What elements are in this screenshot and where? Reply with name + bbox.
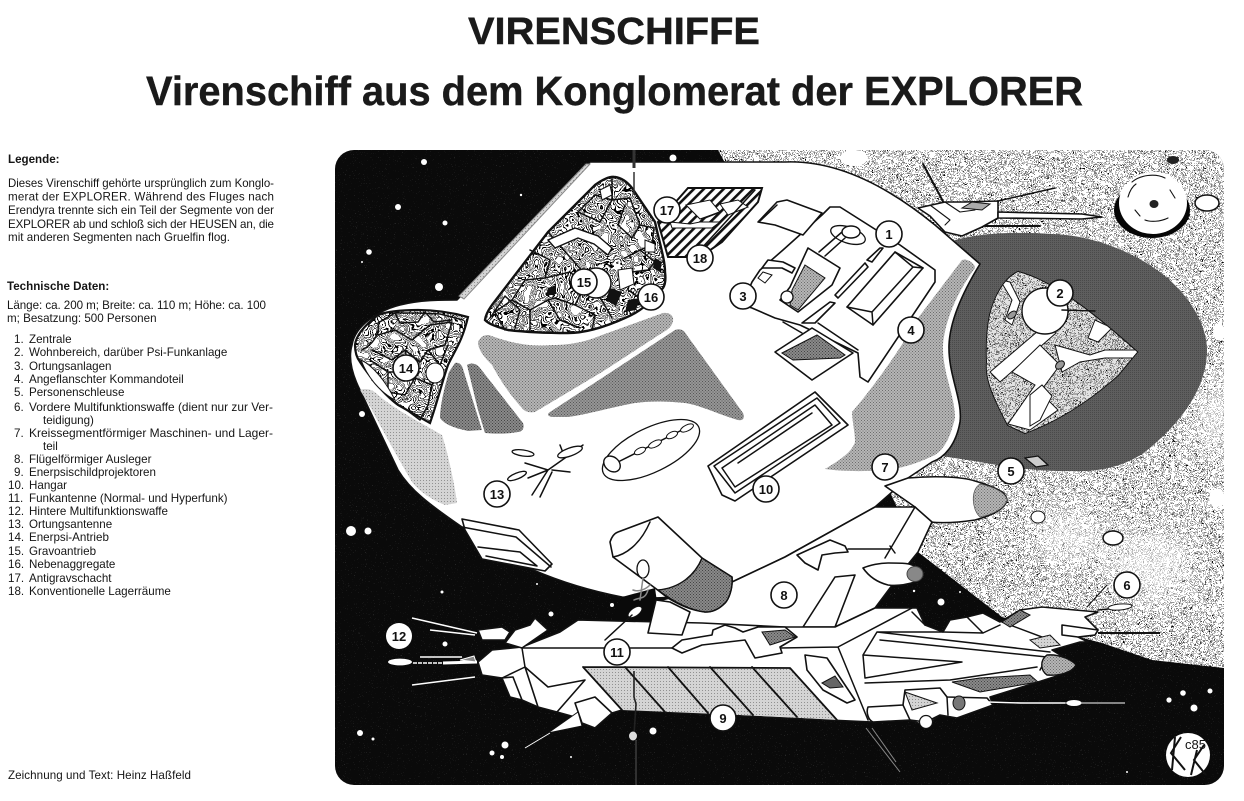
callout 4: 4 [907, 323, 915, 338]
callout 9: 9 [719, 711, 727, 726]
technical data text block [7, 280, 266, 325]
asteroid rocks [840, 150, 1225, 545]
hull edge strip [459, 164, 590, 299]
numbered parts list: 7. [14, 427, 24, 440]
space background [335, 150, 1224, 785]
numbered parts list: Enerpsischildprojektoren [29, 466, 156, 479]
title: VIRENSCHIFFE [468, 11, 760, 53]
wing lobe [885, 477, 1007, 523]
numbered parts list: teidigung) [43, 414, 94, 427]
credit line: Zeichnung und Text: Heinz Haßfeld [8, 769, 191, 782]
forward multifunction weapon 6 [1002, 585, 1160, 648]
main hull [351, 162, 980, 598]
numbered parts list: 15. [8, 545, 24, 558]
callout 11: 11 [610, 645, 624, 660]
callout 8 [771, 582, 797, 608]
numbered parts list: Wohnbereich, darüber Psi-Funkanlage [29, 346, 227, 359]
lower ship body [478, 607, 1098, 728]
callout 18: 18 [693, 251, 707, 266]
wing pylon 8 [663, 506, 933, 626]
callout 2 [1047, 280, 1073, 306]
callout 15: 15 [577, 275, 591, 290]
numbered parts list: Hangar [29, 479, 67, 492]
numbered parts list: Hintere Multifunktionswaffe [29, 505, 168, 518]
callout 10: 10 [759, 482, 773, 497]
numbered parts list: Enerpsi-Antrieb [29, 531, 109, 544]
callout 3: 3 [739, 289, 747, 304]
callout 14 [393, 355, 419, 381]
callout 13 [484, 481, 510, 507]
segment 7: dark ring disc [935, 233, 1207, 471]
rear multifunction weapon 12 [388, 618, 612, 748]
numbered parts list: Funkantenne (Normal- und Hyperfunk) [29, 492, 228, 505]
upper needle weapon [918, 164, 1102, 236]
callout 9 [710, 705, 736, 731]
fold marks [629, 150, 900, 785]
technical data text block: Technische Daten: [7, 280, 109, 293]
numbered parts list: 16. [8, 558, 24, 571]
callout 1 [876, 221, 902, 247]
asteroid surface [700, 150, 1233, 675]
numbered parts list: Flügelförmiger Ausleger [29, 453, 152, 466]
numbered parts list: Vordere Multifunktionswaffe (dient nur zur Ver- [29, 401, 273, 414]
legend text block: EXPLORER ab und schloß sich der HEUSEN an, die [8, 218, 274, 231]
signature monogram: c85 [1185, 737, 1206, 752]
legend text block: merat der EXPLORER. Während des Fluges nach [8, 190, 274, 204]
technical data text block: Länge: ca. 200 m; Breite: ca. 110 m; Höhe: ca. 100 [7, 299, 266, 312]
callout 7: 7 [881, 460, 889, 475]
numbered parts list: Angeflanschter Kommandoteil [29, 373, 184, 386]
radio antenna 11 [605, 560, 650, 640]
stripe panel 9 [583, 667, 837, 720]
numbered parts list: 13. [8, 518, 24, 531]
section 14: enerpsi drive [350, 305, 470, 425]
callout 3 [730, 283, 756, 309]
legend text block: Erendyra trennte sich ein Teil der Segmente von der [8, 204, 274, 217]
callout 10 [753, 476, 779, 502]
callout 11 [604, 639, 630, 665]
numbered parts list: Zentrale [29, 333, 72, 346]
legend text block: Legende: [8, 153, 60, 166]
crater [1114, 172, 1190, 238]
numbered parts list: 2. [14, 346, 24, 359]
numbered parts list: 1. [14, 333, 24, 346]
callout 6: 6 [1123, 578, 1131, 593]
numbered parts list [8, 333, 273, 598]
legend text block: Dieses Virenschiff gehörte ursprünglich zum Konglo- [8, 177, 274, 190]
callout 8: 8 [780, 588, 788, 603]
callout 13: 13 [490, 487, 504, 502]
callout 15 [571, 269, 597, 295]
center ellipse antenna [602, 418, 700, 482]
section 15-16: grav drive and auxiliary units [480, 172, 670, 337]
numbered parts list: Gravoantrieb [29, 545, 96, 558]
technical data text block: m; Besatzung: 500 Personen [7, 312, 157, 325]
section 2: living quarters [985, 270, 1140, 435]
callout 18 [687, 245, 713, 271]
callout 12 [386, 623, 412, 649]
numbered parts list: 9. [14, 466, 24, 479]
callout 2: 2 [1056, 286, 1064, 301]
callout 12: 12 [392, 629, 406, 644]
callout 16: 16 [644, 290, 658, 305]
numbered parts list: Kreissegmentförmiger Maschinen- und Lager- [29, 427, 273, 440]
illustration panel [335, 150, 1233, 785]
numbered parts list: Nebenaggregate [29, 558, 115, 571]
numbered parts list: 14. [8, 531, 24, 544]
numbered parts list: Ortungsantenne [29, 518, 112, 531]
small airlock [1025, 456, 1048, 467]
callout 4 [898, 317, 924, 343]
stars [346, 154, 1212, 773]
numbered parts list: 11. [8, 492, 23, 505]
lower hull hatch [462, 519, 552, 571]
numbered parts list: 18. [8, 585, 24, 598]
legend text block: mit anderen Segmenten nach Gruelfin flog. [8, 231, 230, 244]
numbered parts list: 8. [14, 453, 24, 466]
callout 17: 17 [660, 203, 674, 218]
callout 5: 5 [1007, 464, 1015, 479]
numbered parts list: Antigravschacht [29, 572, 112, 585]
callout 14: 14 [399, 361, 414, 376]
lower forward needle [988, 700, 1125, 706]
callout 1: 1 [885, 227, 893, 242]
numbered parts list: 5. [14, 386, 24, 399]
callout 6 [1114, 572, 1140, 598]
legend text block [8, 153, 274, 244]
callout 17 [654, 197, 680, 223]
lower ship nose engine [805, 655, 1076, 728]
callout 16 [638, 284, 664, 310]
center command structure [742, 200, 935, 382]
numbered parts list: 17. [8, 572, 24, 585]
nozzle segment [610, 517, 732, 635]
numbered parts list: 4. [14, 373, 24, 386]
numbered parts list: 6. [14, 401, 24, 414]
numbered parts list: Ortungsanlagen [29, 360, 112, 373]
lower ship top weapon [672, 625, 797, 658]
ortung antenna [507, 444, 584, 497]
callouts 1-18 [386, 197, 1140, 731]
subtitle: Virenschiff aus dem Konglomerat der EXPLORER [146, 68, 1083, 114]
numbered parts list: 12. [8, 505, 24, 518]
section 17-18: antigrav shaft and storage [658, 188, 762, 257]
callout 5 [998, 458, 1024, 484]
callout 7 [872, 454, 898, 480]
numbered parts list: teil [43, 440, 58, 453]
numbered parts list: Konventionelle Lagerräume [29, 585, 171, 598]
numbered parts list: Personenschleuse [29, 386, 124, 399]
hangar [708, 392, 848, 501]
gray panels on hull [360, 260, 975, 505]
numbered parts list: 3. [14, 360, 24, 373]
numbered parts list: 10. [8, 479, 24, 492]
signature monogram [1166, 733, 1210, 777]
